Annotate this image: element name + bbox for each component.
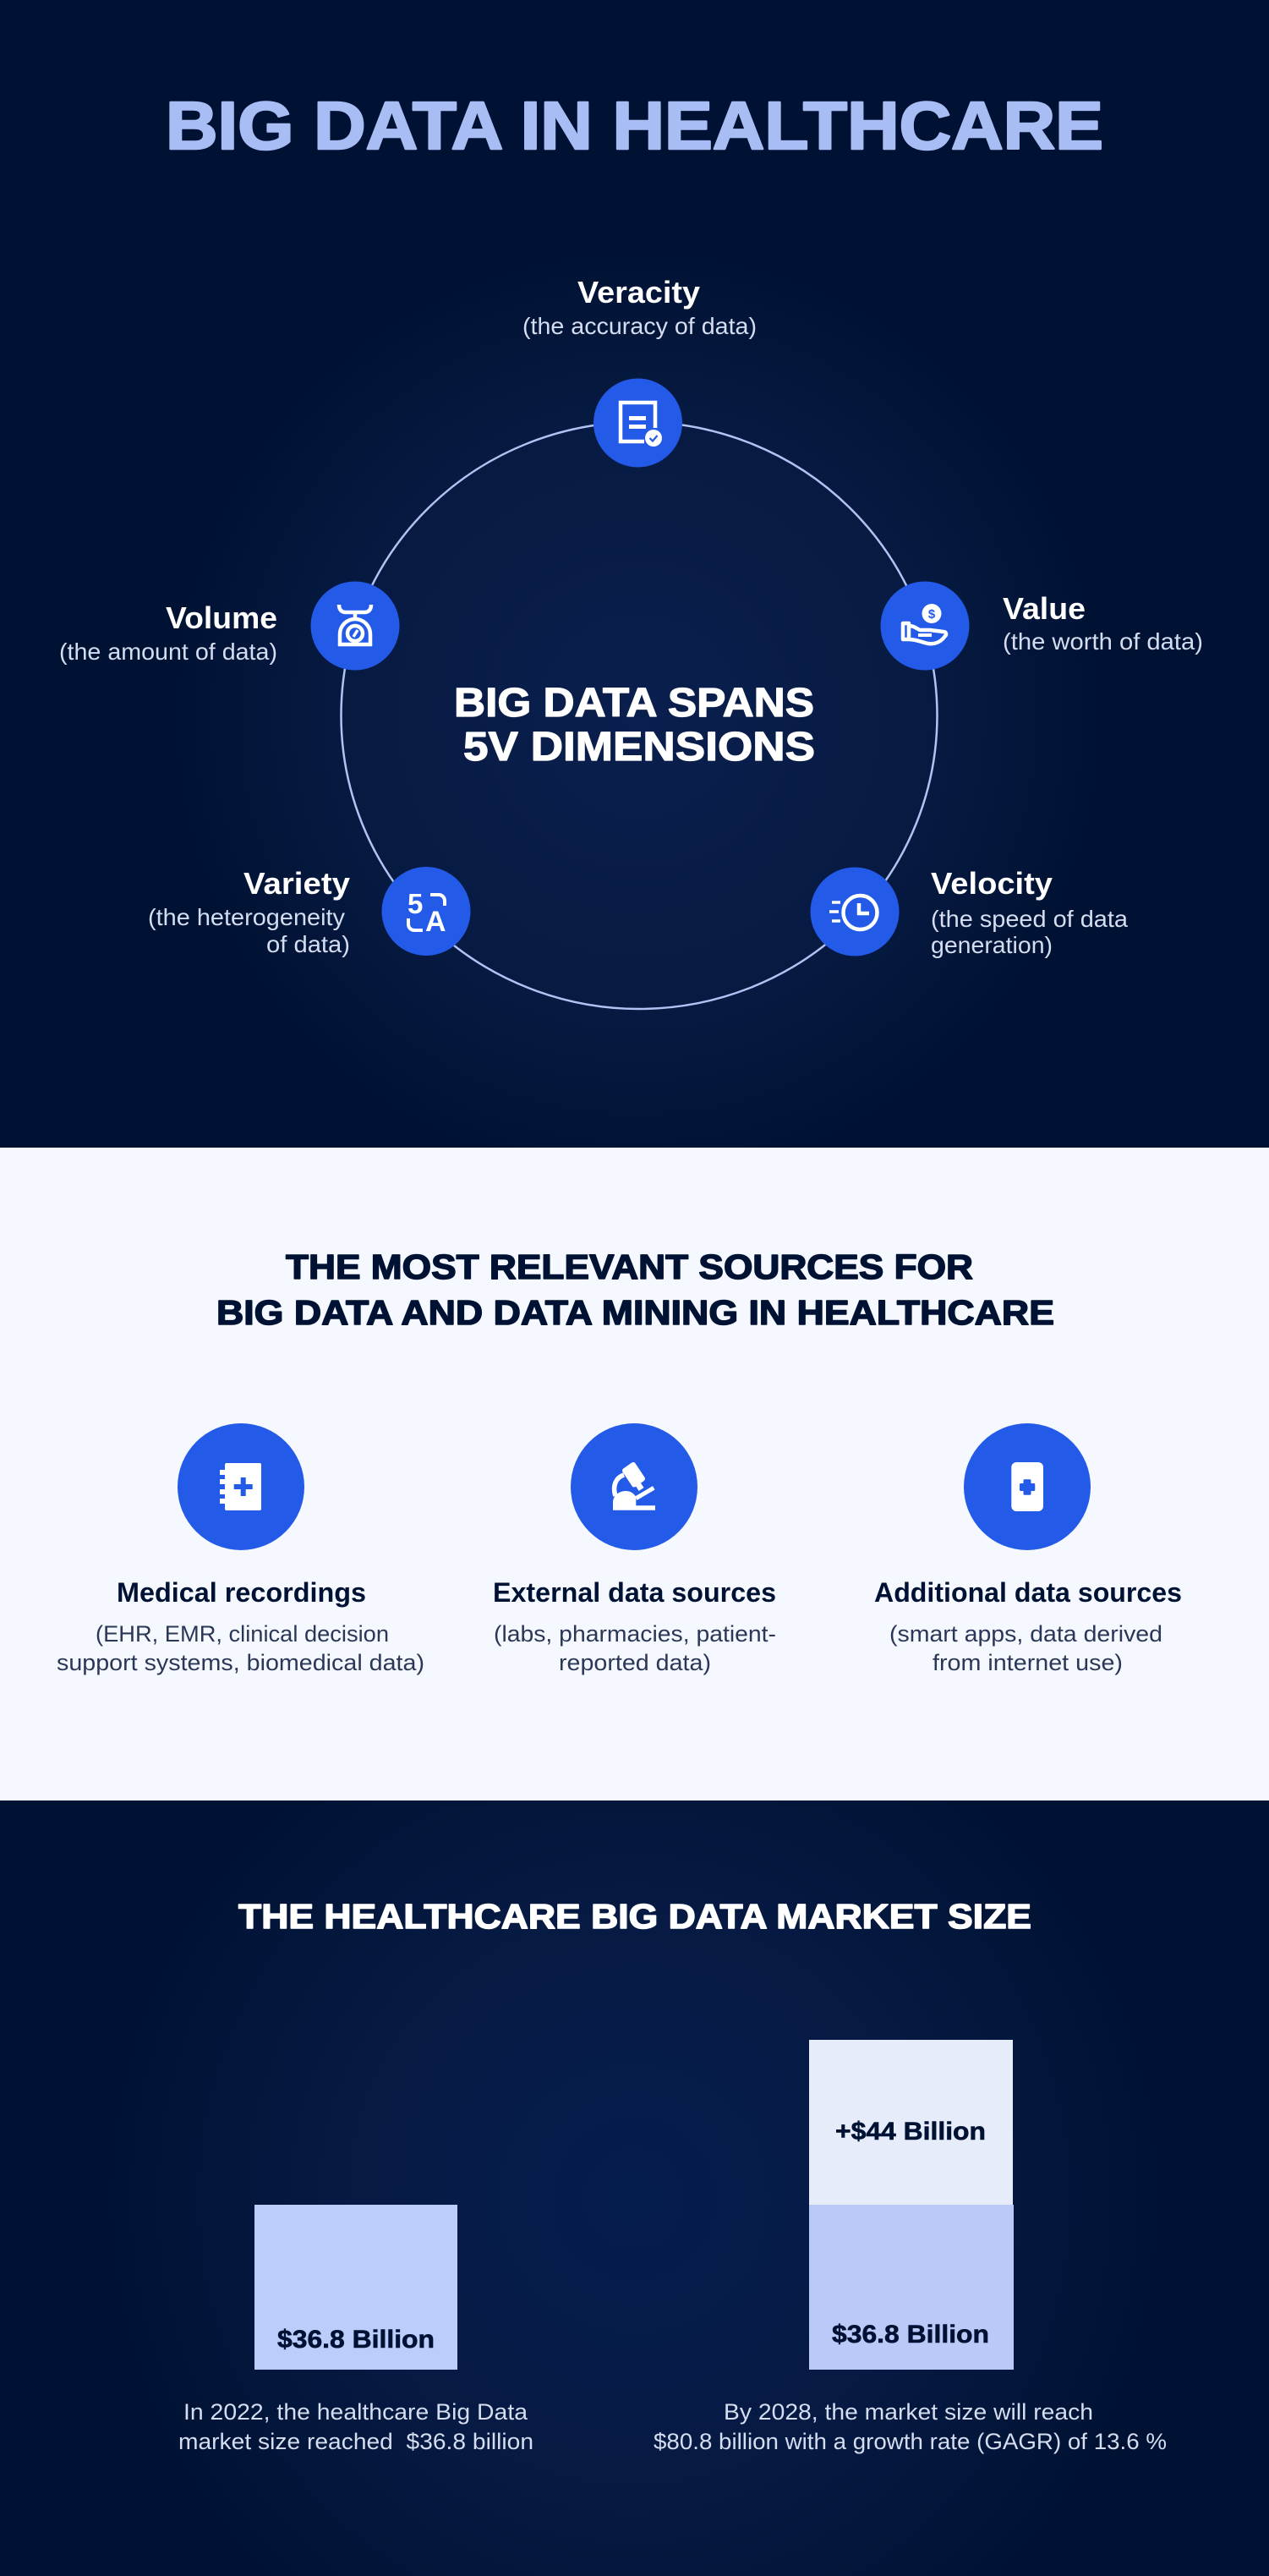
panel: 5V dimensions background xyxy=(0,0,1269,1148)
sublabel: Variety xyxy=(148,904,350,957)
sublabel: Velocity xyxy=(931,906,1128,958)
item: Velocity xyxy=(810,866,1128,958)
icon: translate 5 and A: 5 xyxy=(408,888,423,919)
icon: medical phone xyxy=(1011,1462,1043,1511)
description: Medical recordings: (EHR, EMR, clinical decision xyxy=(96,1621,389,1647)
bar chart: 2028 xyxy=(809,2040,1014,2370)
sublabel: Volume: (the amount of data) xyxy=(59,639,277,665)
description: Medical recordings: support systems, biomedical data) xyxy=(57,1650,424,1675)
center heading: BIG DATA SPANS xyxy=(454,681,814,726)
sublabel: Value: (the worth of data) xyxy=(1003,628,1203,655)
source: External data sources xyxy=(493,1423,776,1675)
item: Veracity xyxy=(522,275,757,467)
description: Additional data sources: from internet use) xyxy=(933,1650,1123,1675)
sublabel: Variety: (the heterogeneity xyxy=(148,904,345,930)
bar: 2022 market size xyxy=(254,2205,457,2370)
icon: hand holding coin xyxy=(903,604,946,644)
heading: sources xyxy=(216,1247,1054,1332)
source: Additional data sources xyxy=(874,1423,1182,1675)
item: Volume xyxy=(59,582,399,670)
sublabel: Veracity: (the accuracy of data) xyxy=(522,313,757,339)
title: BIG DATA IN HEALTHCARE xyxy=(166,88,1103,163)
bar value: 2022: $36.8 Billion xyxy=(277,2326,435,2354)
icon: fast clock xyxy=(829,896,878,929)
label: External data sources: External data sources xyxy=(493,1577,776,1608)
sublabel: Variety: of data) xyxy=(266,931,350,957)
heading: sources: BIG DATA AND DATA MINING IN HEALTHCARE xyxy=(216,1293,1054,1332)
caption: 2022: In 2022, the healthcare Big Data xyxy=(183,2399,528,2425)
center heading: 5V DIMENSIONS xyxy=(463,725,815,770)
bar value: base: $36.8 Billion xyxy=(832,2321,989,2349)
label: Veracity: Veracity xyxy=(577,275,700,310)
icon: microscope xyxy=(613,1465,655,1510)
panel: sources background xyxy=(0,1148,1269,1800)
source: Medical recordings xyxy=(57,1423,424,1675)
description: Medical recordings xyxy=(57,1621,424,1675)
center heading xyxy=(454,681,815,770)
item: Value xyxy=(881,582,1203,670)
icon: translate 5 and A: A xyxy=(425,906,446,938)
label: Variety: Variety xyxy=(243,866,350,901)
sublabel: Velocity: generation) xyxy=(931,932,1053,958)
icon: weighing scale xyxy=(339,605,371,644)
caption: 2022: market size reached $36.8 billion xyxy=(178,2429,533,2454)
label: Volume: Volume xyxy=(166,600,277,635)
description: External data sources xyxy=(494,1621,776,1675)
icon: document with check xyxy=(621,403,662,447)
label: Additional data sources: Additional data sources xyxy=(874,1577,1182,1608)
label: Medical recordings: Medical recordings xyxy=(117,1577,366,1608)
bar: 2028 base xyxy=(809,2205,1014,2370)
sublabel: Velocity: (the speed of data xyxy=(931,906,1128,932)
caption: 2022 xyxy=(178,2399,533,2454)
caption: 2028 xyxy=(654,2399,1167,2454)
description: External data sources: reported data) xyxy=(559,1650,711,1675)
item: Variety xyxy=(148,866,470,957)
panel: market size background xyxy=(0,1800,1269,2576)
caption: 2028: By 2028, the market size will reach xyxy=(724,2399,1093,2425)
icon: medical notebook xyxy=(220,1463,261,1510)
bar value: growth: +$44 Billion xyxy=(835,2118,986,2146)
caption: 2028: $80.8 billion with a growth rate (GAGR) of 13.6 % xyxy=(654,2429,1167,2454)
description: Additional data sources: (smart apps, data derived xyxy=(889,1621,1162,1647)
label: Value: Value xyxy=(1003,591,1086,626)
label: Velocity: Velocity xyxy=(931,866,1053,901)
bar: 2028 added growth xyxy=(809,2040,1013,2205)
description: External data sources: (labs, pharmacies, patient- xyxy=(494,1621,776,1647)
bar chart: 2022 xyxy=(254,2205,457,2370)
diagram: 5V ring xyxy=(342,422,937,1009)
heading: market size: THE HEALTHCARE BIG DATA MARKET SIZE xyxy=(238,1897,1031,1936)
description: Additional data sources xyxy=(889,1621,1162,1675)
icon: hand holding coin: $ xyxy=(928,607,936,622)
heading: sources: THE MOST RELEVANT SOURCES FOR xyxy=(286,1247,973,1286)
icon: translate 5 and A xyxy=(408,888,446,938)
